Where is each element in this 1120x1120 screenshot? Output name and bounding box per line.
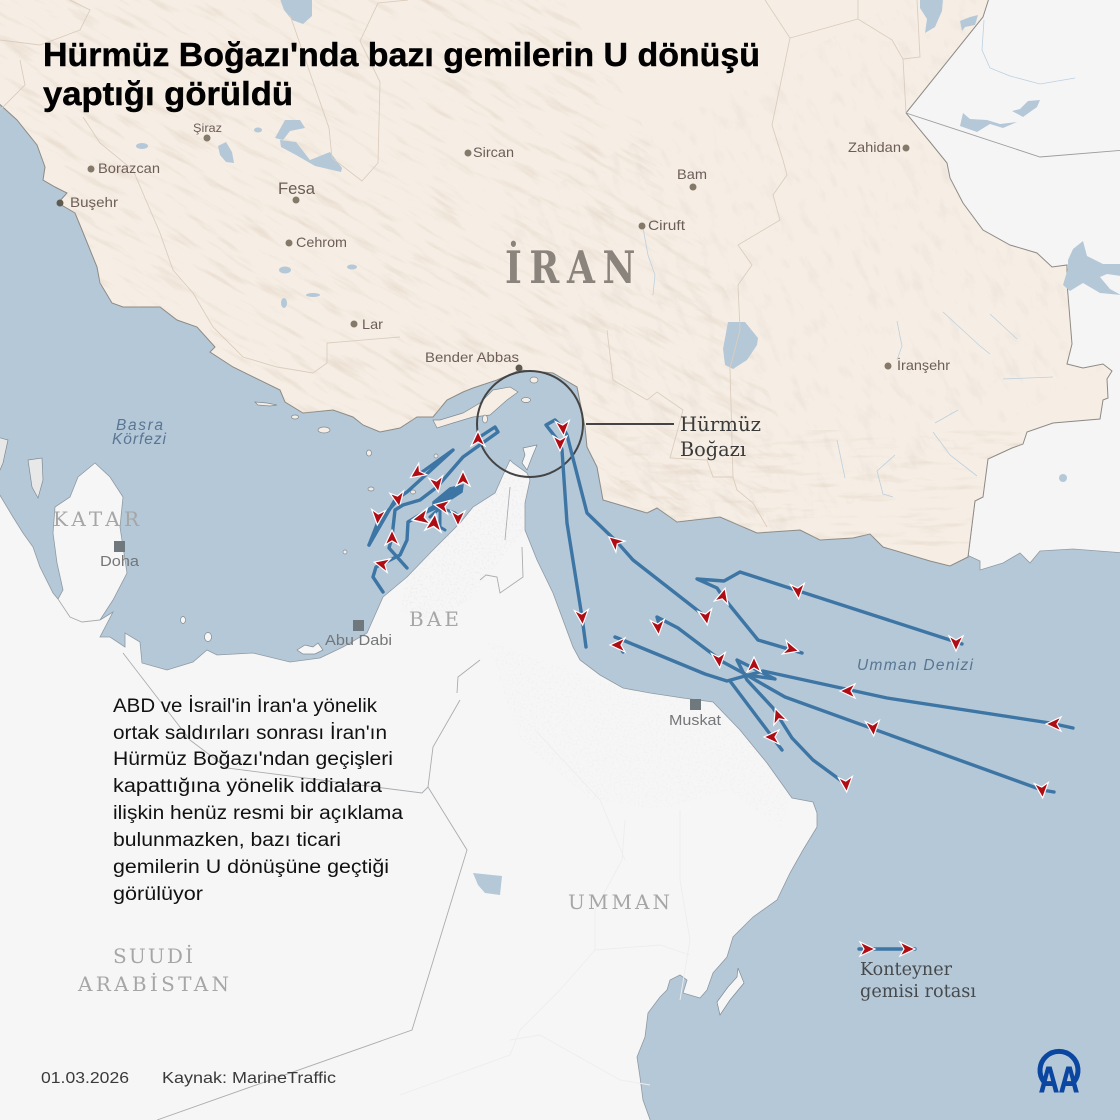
legend: container ship route [859, 942, 976, 1002]
route: Strait of Hormuz U-turn [546, 420, 714, 647]
title: Hürmüz Boğazı'nda bazı gemilerin U dönüşü [43, 36, 760, 73]
sea label: Basra Körfezi: Körfezi [112, 431, 167, 448]
roads in Oman and Saudi Arabia [400, 730, 690, 1095]
city: Buşehr: Buşehr [70, 194, 118, 210]
logo: Anadolu Agency: AA [1039, 1059, 1079, 1100]
capital: Doha: Doha [100, 553, 140, 570]
sea label: Basra Körfezi [112, 417, 167, 448]
country label: Umman: UMMAN [568, 890, 670, 914]
body text: kapattığına yönelik iddialara [113, 776, 382, 797]
city: Şiraz [193, 121, 222, 142]
title [43, 36, 760, 112]
capital: Doha [100, 541, 140, 570]
route: northern Gulf of Oman [697, 572, 963, 658]
callout label [680, 412, 761, 461]
borders: Arabian Peninsula [58, 487, 523, 1120]
source: Kaynak: MarineTraffic [162, 1070, 336, 1087]
city: Şiraz: Şiraz [193, 121, 222, 135]
country label: Katar: KATAR [53, 507, 140, 531]
sea label: Umman Denizi: Umman Denizi [857, 657, 974, 674]
lakes [136, 0, 1120, 895]
country label: İran: İRAN [505, 240, 643, 294]
route: Gulf cluster north leg [369, 450, 453, 545]
land: Afghanistan and Pakistan [906, 0, 1120, 570]
capital: Abu Dabi [325, 620, 392, 649]
route: Muskat turn [650, 617, 854, 793]
date: 01.03.2026 [41, 1070, 129, 1087]
city: Ciruft: Ciruft [648, 217, 685, 233]
body text: ABD ve İsrail'in İran'a yönelik [113, 696, 378, 717]
city: Bam: Bam [677, 166, 707, 182]
city: Zahidan: Zahidan [848, 139, 901, 155]
city: Sircan: Sircan [473, 144, 514, 160]
city: Bender Abbas [425, 349, 522, 372]
route: Gulf cluster south leg and anchorage [373, 471, 470, 592]
route: southeastern approach [747, 675, 1054, 799]
title: yaptığı görüldü [43, 75, 293, 112]
country label: BAE: BAE [409, 607, 459, 631]
ship routes [369, 420, 1073, 799]
body text: bulunmazken, bazı ticari [113, 830, 341, 851]
terrain texture: Oman mountains [480, 640, 800, 830]
body text: görülüyor [113, 884, 204, 905]
borders inside Iran [0, 0, 920, 527]
capital: Abu Dabi: Abu Dabi [325, 632, 392, 649]
body text: ilişkin henüz resmi bir açıklama [113, 803, 403, 824]
callout: Hürmüz Boğazı [477, 371, 761, 477]
sea label: Basra Körfezi: Basra [116, 417, 163, 434]
legend symbol [859, 942, 915, 956]
legend label: Konteyner [860, 960, 953, 980]
route: eastern approach to Oman coast [610, 637, 1073, 731]
body text [113, 696, 403, 905]
body text: Hürmüz Boğazı'ndan geçişleri [113, 749, 393, 770]
callout label: Hürmüz [680, 412, 761, 436]
city: Cehrom: Cehrom [296, 234, 347, 250]
city: Lar: Lar [362, 316, 383, 332]
body text: ortak saldırıları sonrası İran'ın [113, 723, 387, 744]
callout leader line [586, 423, 674, 425]
city: Bam [677, 166, 707, 190]
capital: Muskat: Muskat [669, 712, 722, 729]
islands [0, 377, 744, 1015]
route: Gulf cluster main leg to strait [385, 427, 498, 568]
country label: Suudi Arabistan: ARABİSTAN [77, 972, 229, 996]
city: Fesa: Fesa [278, 179, 316, 198]
logo: Anadolu Agency [1039, 1051, 1079, 1100]
city: Borazcan: Borazcan [98, 160, 160, 176]
borders: Afghanistan and Pakistan [906, 113, 1120, 157]
route: short leg off Muskat [730, 681, 782, 750]
legend label: gemisi rotası [860, 982, 976, 1002]
capital: Muskat [669, 699, 722, 729]
legend label [860, 960, 976, 1002]
body text: gemilerin U dönüşüne geçtiği [113, 857, 389, 878]
rivers [643, 20, 1075, 497]
land: Iran [0, 0, 1112, 566]
country label: Suudi Arabistan: SUUDİ [113, 944, 193, 968]
country label: Suudi Arabistan [77, 944, 229, 996]
land: Arabian Peninsula [0, 460, 817, 1120]
terrain texture: Iran mountains [0, 0, 1023, 546]
city: Lar [350, 316, 383, 332]
urban texture: UAE [402, 478, 526, 612]
city: Bender Abbas: Bender Abbas [425, 349, 519, 365]
city: İranşehr: İranşehr [897, 356, 950, 373]
callout label: Boğazı [680, 437, 746, 461]
callout circle [477, 371, 583, 477]
